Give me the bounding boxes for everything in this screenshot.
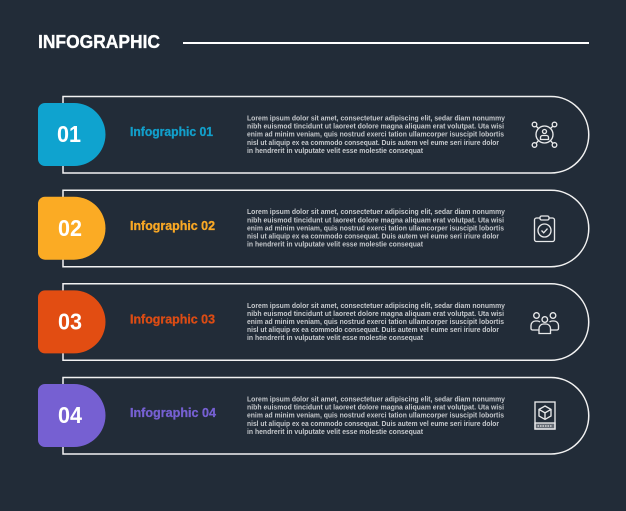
- row 01 number: 01: [57, 121, 81, 147]
- row 03 text: nisl ut aliquip ex ea commodo consequat. Duis autem vel eume seri iriure dolor: [247, 325, 499, 334]
- row 04 text: enim ad minim veniam, quis nostrud exerci tation ullamcorper isuscipit lobortis: [247, 411, 504, 420]
- row 01 text: nisl ut aliquip ex ea commodo consequat. Duis autem vel eume seri iriure dolor: [247, 138, 499, 147]
- row 02 text: enim ad minim veniam, quis nostrud exerci tation ullamcorper isuscipit lobortis: [247, 223, 504, 232]
- title: INFOGRAPHIC: [38, 32, 160, 52]
- row 02 text: nibh euismod tincidunt ut laoreet dolore magna aliquam erat volutpat. Uta wisi: [247, 215, 504, 224]
- row 01 text: in hendrerit in vulputate velit esse molestie consequat: [247, 146, 423, 155]
- icon: clipboard check: [534, 216, 554, 242]
- row 04 text: [247, 394, 506, 436]
- row 03 text: [247, 301, 506, 342]
- row 03 badge: [38, 290, 106, 353]
- row 02 text: in hendrerit in vulputate velit esse molestie consequat: [247, 240, 423, 249]
- row 02 label: Infographic 02: [130, 219, 215, 233]
- row 01 label: Infographic 01: [130, 125, 213, 139]
- row 04 label: Infographic 04: [130, 406, 216, 420]
- panel: row 03: [38, 284, 589, 360]
- row 01 text: Lorem ipsum dolor sit amet, consectetuer adipiscing elit, sedar diam nonummy: [247, 114, 506, 122]
- row 03 text: in hendrerit in vulputate velit esse molestie consequat: [247, 333, 423, 342]
- row 02 number: 02: [58, 215, 82, 241]
- icon: group of people: [531, 313, 558, 334]
- row 04 text: nibh euismod tincidunt ut laoreet dolore magna aliquam erat volutpat. Uta wisi: [247, 403, 504, 412]
- row 02 outline: [63, 190, 589, 267]
- row 03 text: enim ad minim veniam, quis nostrud exerci tation ullamcorper isuscipit lobortis: [247, 317, 504, 326]
- row 04 text: in hendrerit in vulputate velit esse molestie consequat: [247, 427, 423, 436]
- row 04 number: 04: [58, 402, 82, 428]
- row 01 badge: [38, 103, 106, 166]
- row 04 outline: [63, 378, 589, 454]
- row 03 number: 03: [58, 308, 82, 334]
- row 02 badge: [38, 197, 105, 260]
- row 03 text: Lorem ipsum dolor sit amet, consectetuer adipiscing elit, sedar diam nonummy: [247, 301, 506, 310]
- row 04 text: nisl ut aliquip ex ea commodo consequat. Duis autem vel eume seri iriure dolor: [247, 419, 499, 428]
- icon: product box manual: [535, 402, 555, 429]
- row 01 text: enim ad minim veniam, quis nostrud exerci tation ullamcorper isuscipit lobortis: [247, 130, 504, 139]
- row 04 text: Lorem ipsum dolor sit amet, consectetuer adipiscing elit, sedar diam nonummy: [247, 394, 506, 404]
- row 03 text: nibh euismod tincidunt ut laoreet dolore magna aliquam erat volutpat. Uta wisi: [247, 309, 504, 318]
- row 01 text: nibh euismod tincidunt ut laoreet dolore magna aliquam erat volutpat. Uta wisi: [247, 122, 504, 131]
- row 03 label: Infographic 03: [130, 312, 215, 326]
- row 01 outline: [63, 96, 589, 173]
- panel: row 02: [38, 190, 589, 267]
- row 04 badge: [38, 384, 106, 447]
- row 02 text: nisl ut aliquip ex ea commodo consequat. Duis autem vel eume seri iriure dolor: [247, 232, 499, 240]
- row 02 text: Lorem ipsum dolor sit amet, consectetuer adipiscing elit, sedar diam nonummy: [247, 207, 506, 216]
- icon: network person: [532, 122, 557, 147]
- row 01 text: [247, 114, 506, 155]
- title rule: [183, 42, 589, 44]
- row 03 outline: [63, 284, 589, 360]
- row 02 text: [247, 207, 506, 249]
- panel: row 01: [38, 96, 589, 173]
- panel: row 04: [38, 378, 589, 454]
